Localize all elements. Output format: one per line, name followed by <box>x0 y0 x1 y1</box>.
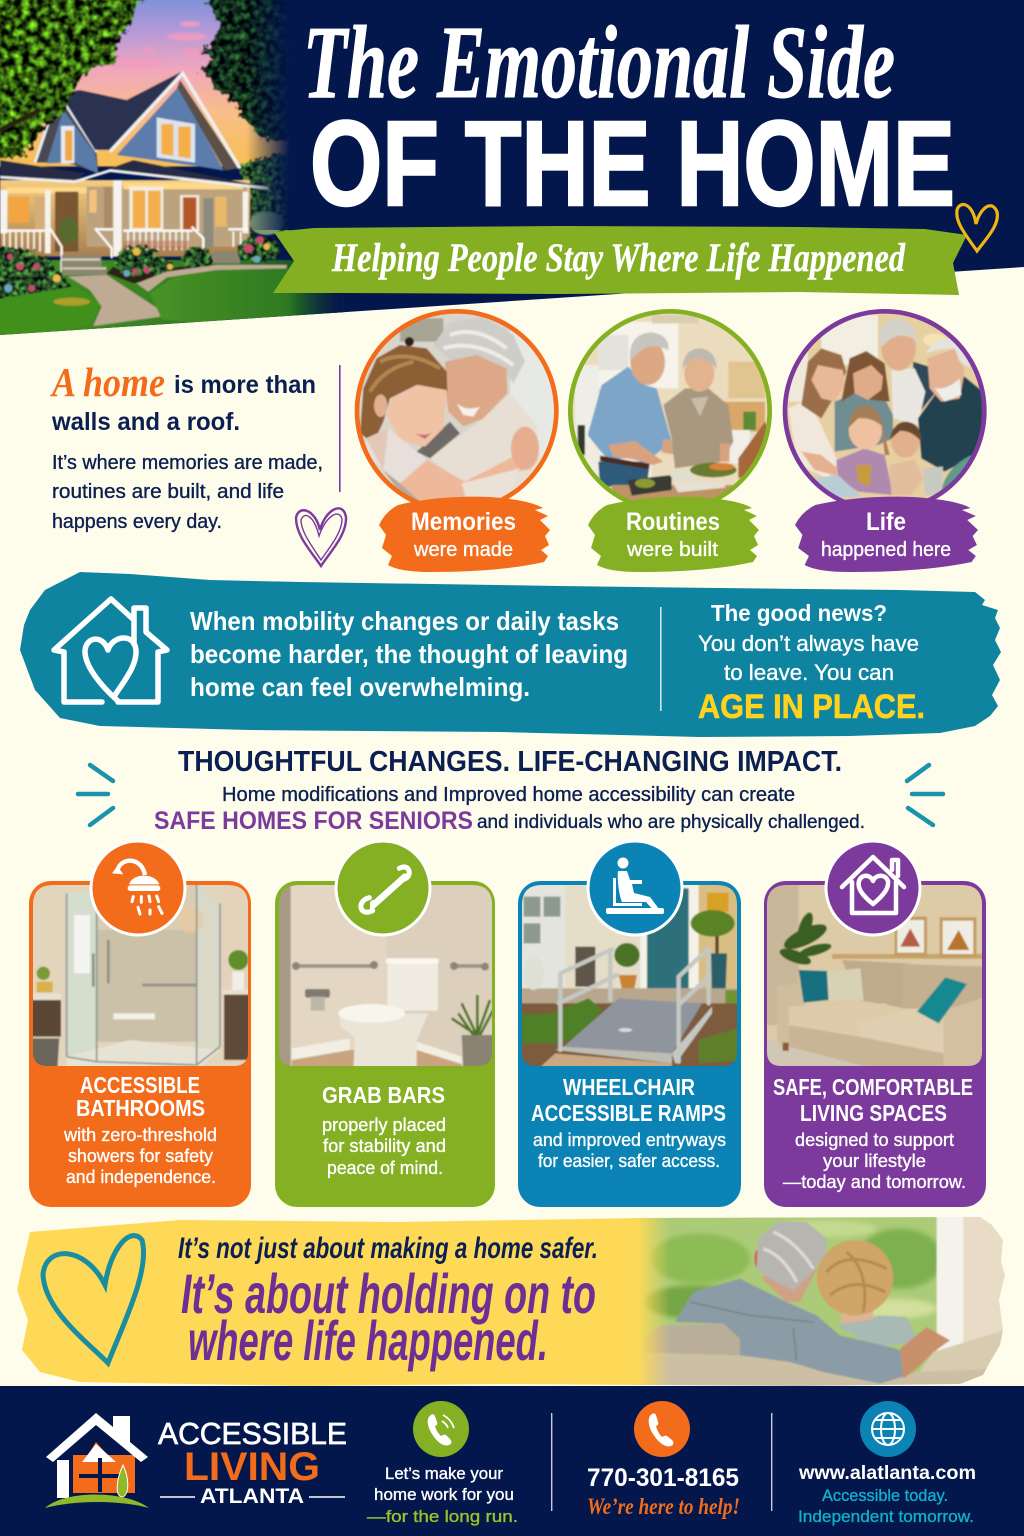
footer text: website: Accessible today. <box>822 1486 948 1505</box>
card: grab bars <box>275 841 496 1207</box>
label: memories: Memories <box>411 508 516 536</box>
card text <box>531 1074 726 1171</box>
icon: house with heart <box>54 599 167 702</box>
lower roofs <box>0 160 85 181</box>
logo <box>45 1413 347 1508</box>
label: memories <box>379 497 550 572</box>
label: life: Life <box>866 508 906 536</box>
photo: house at sunset <box>0 0 347 347</box>
section heading: SAFE HOMES FOR SENIORS <box>154 807 473 835</box>
footer text: home work: Let’s make your <box>385 1464 503 1483</box>
text: good news: to leave. You can <box>724 660 894 685</box>
icon: shower <box>91 841 185 935</box>
card text: your lifestyle <box>823 1151 926 1171</box>
photo: ramp <box>519 882 742 1070</box>
card text: properly placed <box>322 1115 446 1135</box>
shrubs <box>106 266 192 284</box>
intro text block <box>49 359 323 533</box>
intro text block: is more than <box>174 371 316 399</box>
card text: BATHROOMS <box>76 1095 205 1121</box>
text: good news: AGE IN PLACE. <box>698 688 925 726</box>
label: life: happened here <box>821 539 951 561</box>
icon: teal heart <box>43 1236 144 1363</box>
icon: gold heart <box>957 204 997 251</box>
footer text: website: Independent tomorrow. <box>798 1507 974 1526</box>
text: good news <box>698 600 925 726</box>
circle photo: memories <box>354 309 559 502</box>
card text <box>322 1082 446 1178</box>
helper tagline: We’re here to help! <box>587 1494 740 1519</box>
card: living spaces <box>764 841 987 1207</box>
text: mobility <box>190 606 628 702</box>
card text: WHEELCHAIR <box>563 1074 695 1100</box>
label: routines: were built <box>626 539 718 561</box>
heading: a home: A home <box>49 359 165 405</box>
card text: for stability and <box>323 1136 446 1156</box>
label: memories: were made <box>413 539 513 561</box>
right tree <box>196 0 288 143</box>
card text: designed to support <box>795 1130 954 1150</box>
quote text: where life happened. <box>188 1309 548 1372</box>
footer panel <box>0 1386 1024 1536</box>
paragraph: It’s where memories are made, <box>52 452 323 474</box>
quote text: It’s not just about making a home safer. <box>178 1232 598 1265</box>
text: good news: You don’t always have <box>698 631 919 656</box>
section heading: THOUGHTFUL CHANGES. LIFE-CHANGING IMPACT. <box>178 746 842 778</box>
phone number: 770-301-8165 <box>587 1464 739 1492</box>
intro text block: walls and a roof. <box>51 408 240 436</box>
ribbon: subtitle <box>273 226 967 295</box>
railings <box>0 227 248 272</box>
footer text: home work <box>367 1464 518 1526</box>
section heading: Home modifications and Improved home accessibility can create <box>222 784 795 806</box>
text: mobility: When mobility changes or daily tasks <box>190 606 619 636</box>
section heading <box>154 746 865 835</box>
icon: house heart <box>826 841 920 935</box>
quote text <box>178 1232 598 1372</box>
text: mobility: home can feel overwhelming. <box>190 672 530 702</box>
section heading: and individuals who are physically challenged. <box>477 812 865 833</box>
icon: globe <box>860 1401 916 1457</box>
logo: ATLANTA <box>200 1485 304 1508</box>
circle photo: routines <box>568 309 772 502</box>
banner: age in place <box>20 572 1001 737</box>
paragraph: happens every day. <box>52 511 222 533</box>
card text: and independence. <box>66 1167 216 1187</box>
card: wheelchair ramps <box>518 841 742 1207</box>
windows and door <box>129 187 163 230</box>
lawns and path <box>0 286 99 335</box>
columns <box>0 180 248 257</box>
card text: and improved entryways <box>533 1130 726 1150</box>
left tree <box>0 0 147 159</box>
circle photo: life <box>782 309 987 501</box>
dark roof <box>60 72 182 150</box>
logo: LIVING <box>184 1445 320 1489</box>
paragraph: routines are built, and life <box>52 481 284 503</box>
label: routines: Routines <box>626 508 720 536</box>
card text: SAFE, COMFORTABLE <box>773 1074 973 1100</box>
icon: green phone <box>413 1401 469 1457</box>
card text: GRAB BARS <box>322 1082 445 1108</box>
right lower tree <box>240 150 300 233</box>
sparks left <box>78 765 113 825</box>
footer text: website: www.alatlanta.com <box>798 1463 976 1484</box>
lawn base <box>0 258 294 333</box>
quote text: It’s about holding on to <box>181 1262 596 1325</box>
paragraph <box>52 452 323 533</box>
card text: for easier, safer access. <box>538 1151 720 1171</box>
label: routines <box>588 497 759 572</box>
icon: orange phone <box>634 1401 690 1457</box>
footer text: website <box>798 1463 976 1526</box>
card: accessible bathrooms <box>29 841 252 1207</box>
porch body <box>0 180 250 257</box>
card text <box>773 1074 973 1192</box>
card text: LIVING SPACES <box>800 1100 947 1126</box>
card text: ACCESSIBLE <box>80 1072 200 1098</box>
card text: ACCESSIBLE RAMPS <box>531 1100 726 1126</box>
photo: toilet with grab bars <box>276 882 496 1070</box>
card text: —today and tomorrow. <box>783 1172 966 1192</box>
photo: shower <box>30 882 252 1070</box>
ribbon: subtitle: Helping People Stay Where Life Happened <box>331 235 906 280</box>
text: mobility: become harder, the thought of leaving <box>190 639 628 669</box>
footer text: home work: —for the long run. <box>367 1507 518 1526</box>
steps <box>62 255 107 275</box>
icon: wheelchair user <box>588 841 682 935</box>
card text <box>63 1072 217 1187</box>
card text: with zero-threshold <box>63 1125 217 1145</box>
label: life <box>795 497 978 572</box>
photo: sofa <box>764 882 987 1070</box>
text: good news: The good news? <box>711 600 887 626</box>
card text: peace of mind. <box>327 1158 443 1178</box>
photo: couple on sofa <box>630 1209 1010 1392</box>
main gable <box>117 87 224 171</box>
banner: holding on <box>15 1209 1010 1392</box>
header panel <box>0 0 1024 347</box>
left wing <box>35 93 98 173</box>
icon: purple heart <box>296 508 346 566</box>
card text: showers for safety <box>68 1146 213 1166</box>
icon: grab bar <box>336 841 430 935</box>
logo: ACCESSIBLE <box>158 1416 347 1451</box>
fade into navy <box>247 0 290 230</box>
sparks right <box>907 765 943 825</box>
footer text: home work: home work for you <box>374 1485 514 1504</box>
